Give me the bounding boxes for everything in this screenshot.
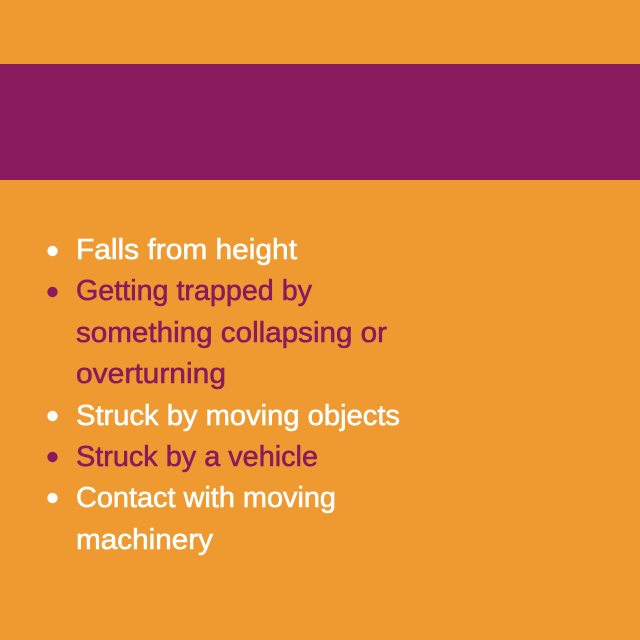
list item: getting trapped: Getting trapped by <box>76 275 312 307</box>
list item: falls from height: Falls from height <box>76 234 297 266</box>
list item: contact with moving machinery <box>47 482 336 556</box>
list item: struck by moving objects: Struck by moving objects <box>76 400 400 432</box>
list item: getting trapped: something collapsing or <box>76 317 387 349</box>
list item: contact with moving machinery: Contact with moving <box>76 482 336 514</box>
list item: getting trapped <box>47 275 387 390</box>
purple title band <box>0 64 640 180</box>
hazard list <box>47 234 400 556</box>
list item: contact with moving machinery: machinery <box>76 524 214 556</box>
list item: struck by a vehicle: Struck by a vehicle <box>76 441 318 473</box>
list item: getting trapped: overturning <box>76 358 226 390</box>
